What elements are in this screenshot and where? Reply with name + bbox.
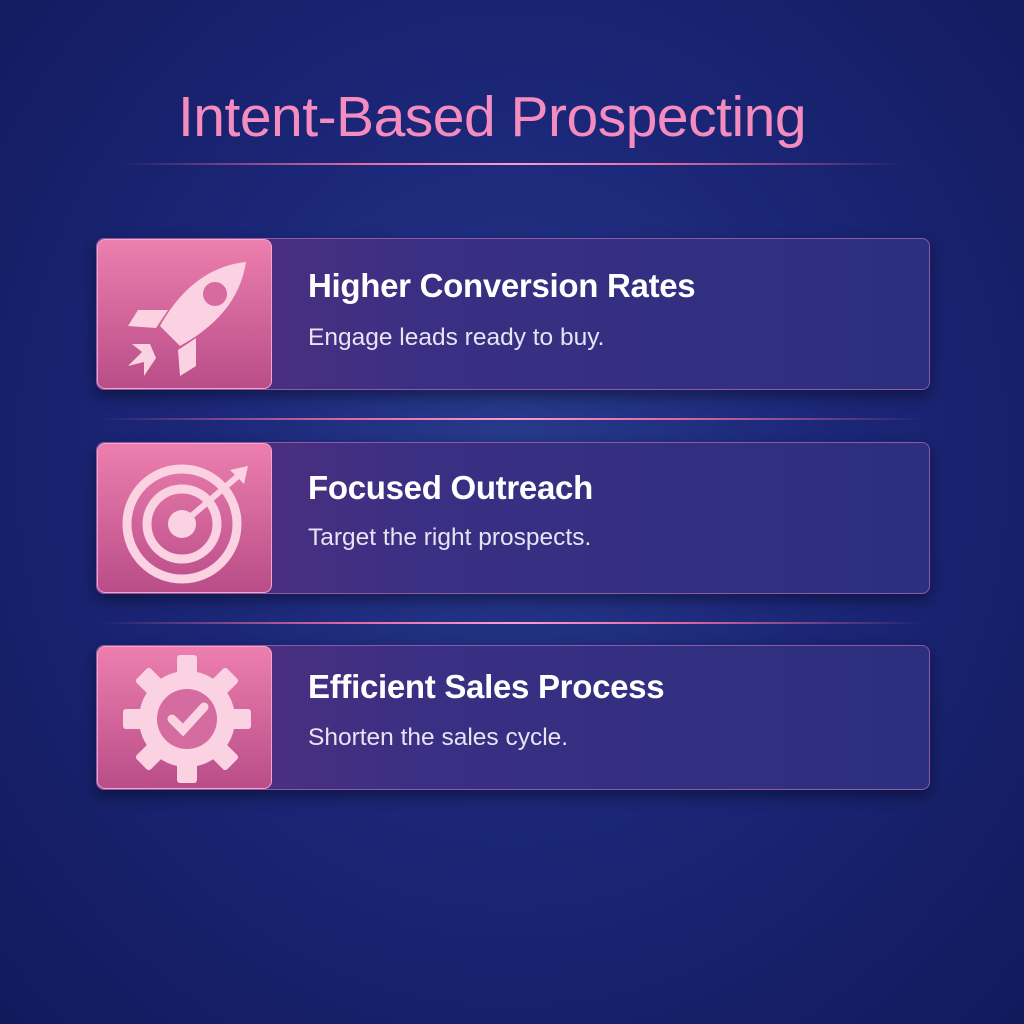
title: Intent-Based Prospecting (178, 85, 806, 149)
card: higher conversion (96, 238, 930, 390)
card: efficient sales (96, 645, 930, 790)
heading: Focused Outreach (308, 469, 593, 506)
text: Shorten the sales cycle. (308, 724, 568, 751)
heading: Efficient Sales Process (308, 668, 664, 705)
icon: gear check (97, 646, 272, 789)
icon: rocket (97, 239, 272, 389)
text: Engage leads ready to buy. (308, 324, 604, 351)
text: Target the right prospects. (308, 524, 591, 551)
icon: target (97, 443, 272, 593)
card: focused outreach (96, 442, 930, 594)
heading: Higher Conversion Rates (308, 267, 695, 304)
